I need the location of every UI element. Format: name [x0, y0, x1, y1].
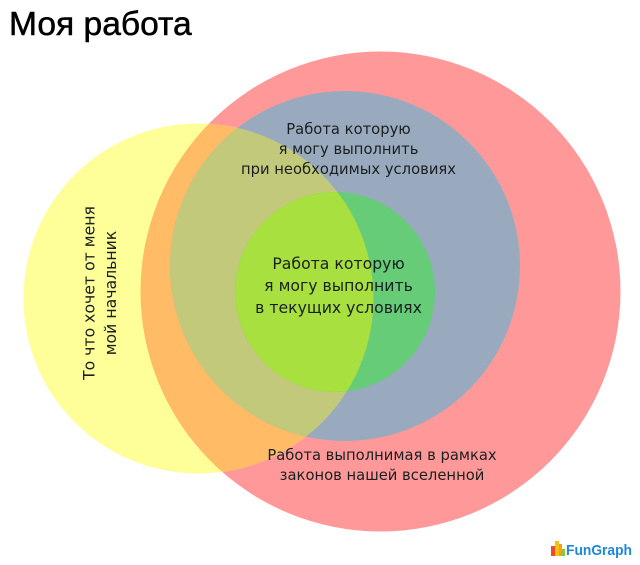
label: laws of the universe: законов нашей вселенной	[280, 467, 484, 484]
label: required conditions	[241, 121, 456, 178]
label: required conditions: я могу выполнить	[279, 141, 418, 158]
label: laws of the universe: Работа выполнимая в рамках	[267, 447, 497, 464]
label: required conditions: при необходимых условиях	[241, 161, 456, 178]
label: current conditions: в текущих условиях	[255, 298, 422, 317]
label: current conditions: Работа которую	[272, 254, 405, 273]
circle: work under current conditions	[235, 192, 435, 392]
logo: FunGraph: FunGraph	[566, 542, 632, 559]
label: laws of the universe	[267, 447, 497, 484]
label: what my boss wants: То что хочет от меня	[80, 206, 98, 381]
title: Моя работа	[9, 6, 192, 43]
circle: work under required conditions	[170, 91, 520, 441]
circle: what my boss wants	[24, 124, 374, 474]
label: what my boss wants	[80, 206, 120, 381]
overlap: boss and current conditions	[235, 192, 374, 392]
venn diagram	[24, 52, 620, 532]
label: current conditions: я могу выполнить	[264, 276, 413, 295]
icon: bars	[551, 541, 565, 556]
overlap: boss and universe	[140, 124, 306, 472]
label: what my boss wants: мой начальник	[101, 231, 120, 355]
overlap: boss and required conditions	[170, 128, 347, 436]
label: required conditions: Работа которую	[286, 121, 411, 138]
label: current conditions	[255, 254, 422, 317]
circle: laws of the universe	[140, 52, 620, 532]
